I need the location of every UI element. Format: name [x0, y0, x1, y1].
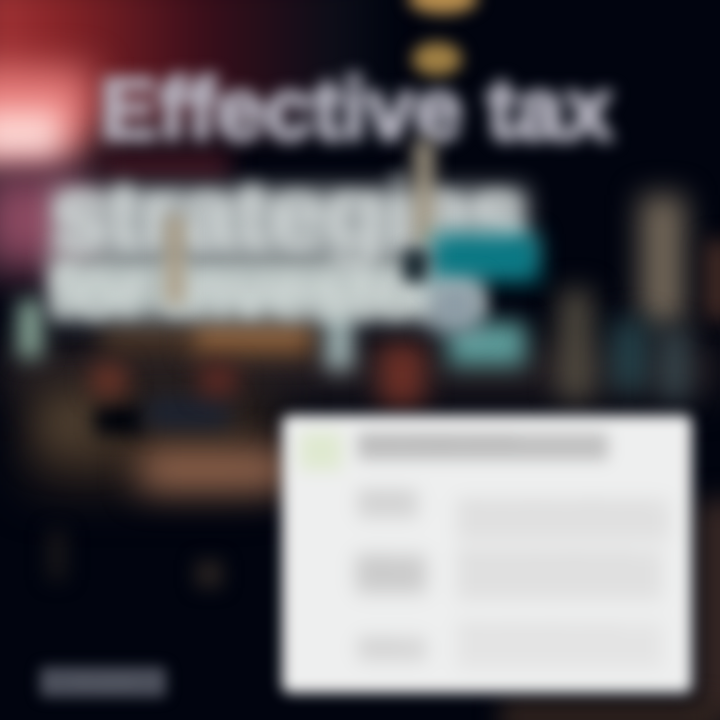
title line 2: strategies [52, 158, 524, 270]
panel: information table [282, 415, 692, 693]
title line 3: for investors [50, 252, 486, 332]
row 2 label [356, 555, 426, 593]
title line 1: Effective tax [100, 61, 613, 158]
decorative cord [414, 140, 434, 245]
dark accent [403, 250, 427, 282]
icon: top gold lamp [408, 0, 478, 14]
grey-blue reflection [430, 282, 480, 332]
row 2 label: Credits [356, 555, 388, 566]
row 3 description: Details of planning steps for the year [457, 623, 619, 634]
title backing [52, 188, 527, 260]
title block [32, 61, 622, 338]
row 3 description [457, 623, 662, 668]
row 2 description [457, 550, 662, 600]
heading: table title [358, 433, 608, 460]
row 1 label: Deductions [358, 490, 408, 501]
row 3 label: Planning [358, 637, 397, 648]
teal highlight [432, 234, 540, 282]
blue-green accent [448, 322, 526, 366]
icon: green badge [300, 432, 342, 470]
row 3 label [358, 637, 426, 661]
row 1 description: Details of the deductions available this year [457, 499, 649, 510]
decorative tan strip [166, 215, 184, 305]
footer label: Tax guide [73, 674, 133, 690]
row 1 label [358, 490, 418, 518]
title backing lower [50, 255, 475, 320]
row 1 description [457, 499, 669, 541]
row 2 description: Details of the credits available this year [457, 550, 630, 561]
icon: second gold lamp [412, 42, 462, 76]
footer label [40, 667, 166, 697]
